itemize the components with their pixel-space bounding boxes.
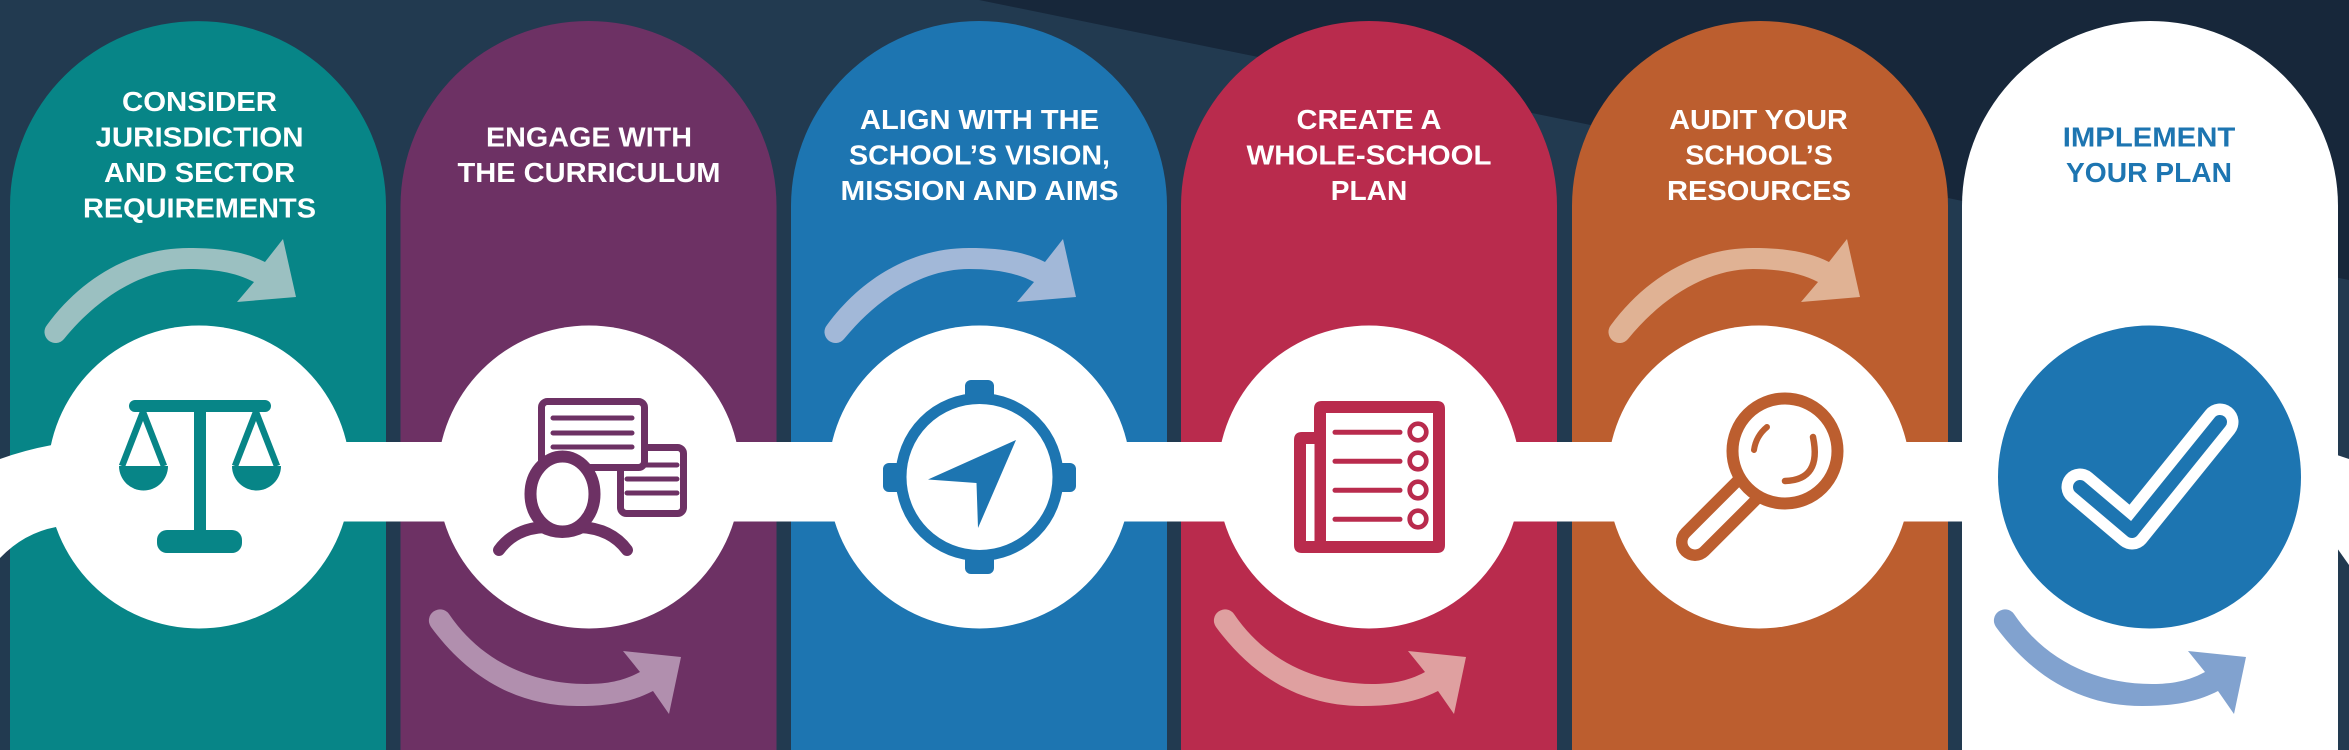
- step 1: consider jurisdiction: [44, 86, 350, 628]
- heading: step 5: AUDIT YOUR: [1669, 104, 1848, 135]
- circle: step 2: [438, 326, 740, 628]
- circle: step 6: [1998, 326, 2301, 628]
- circle: step 5: [1608, 326, 1910, 628]
- heading: step 1: AND SECTOR: [104, 157, 295, 188]
- heading: step 1: CONSIDER: [122, 86, 277, 117]
- heading: step 6: YOUR PLAN: [2066, 157, 2232, 188]
- arrow: step 5 curved up: [1608, 239, 1860, 343]
- arrow: step 1 curved up: [44, 239, 296, 343]
- step 2: engage with curriculum: [429, 122, 740, 714]
- icon: check mark: [2080, 422, 2220, 531]
- arrow: step 6 curved down: [1994, 609, 2246, 714]
- step 4: whole-school plan: [1214, 104, 1520, 714]
- heading: step 3: MISSION AND AIMS: [840, 175, 1118, 206]
- icon: checklist document: [1294, 401, 1445, 553]
- heading: step 6: [2063, 122, 2235, 188]
- icon: person with documents: [499, 402, 684, 550]
- heading: step 2: THE CURRICULUM: [458, 157, 720, 188]
- heading: step 4: PLAN: [1331, 175, 1407, 206]
- arrow: step 4 curved down: [1214, 609, 1466, 714]
- heading: step 6: IMPLEMENT: [2063, 122, 2235, 152]
- icon: magnifying glass: [1695, 398, 1838, 542]
- icon: compass: [883, 380, 1076, 574]
- arrow: step 2 curved down: [429, 609, 681, 714]
- heading: step 5: [1667, 104, 1851, 206]
- circle: step 3: [828, 326, 1131, 628]
- step 6: implement plan: [1994, 122, 2301, 714]
- icon: balance scales: [119, 400, 281, 553]
- panel: step 2 column: [400, 21, 776, 750]
- circle: step 1: [48, 326, 350, 628]
- heading: step 5: RESOURCES: [1667, 175, 1851, 206]
- panel: step 4 column: [1181, 21, 1557, 750]
- heading: step 1: [83, 86, 316, 224]
- panel: step 1 column: [10, 21, 386, 750]
- heading: step 2: ENGAGE WITH: [486, 122, 692, 152]
- heading: step 4: [1246, 104, 1492, 206]
- arrow: step 3 curved up: [824, 239, 1076, 343]
- heading: step 3: [840, 104, 1118, 206]
- heading: step 3: SCHOOL’S VISION,: [849, 140, 1110, 170]
- heading: step 1: JURISDICTION: [96, 122, 304, 152]
- connecting white band: [0, 442, 2349, 565]
- heading: step 5: SCHOOL’S: [1685, 140, 1833, 170]
- panel: step 3 column: [791, 21, 1167, 750]
- heading: step 4: CREATE A: [1296, 104, 1442, 135]
- dark background wedge: [979, 0, 2349, 280]
- step 3: align with vision: [824, 104, 1131, 628]
- heading: step 1: REQUIREMENTS: [83, 192, 316, 224]
- panel: step 5 column: [1572, 21, 1948, 750]
- heading: step 3: ALIGN WITH THE: [860, 104, 1099, 135]
- step 5: audit resources: [1608, 104, 1910, 628]
- heading: step 4: WHOLE-SCHOOL: [1246, 140, 1492, 170]
- circle: step 4: [1218, 326, 1520, 628]
- heading: step 2: [458, 122, 720, 188]
- panel: step 6 column: [1962, 21, 2338, 750]
